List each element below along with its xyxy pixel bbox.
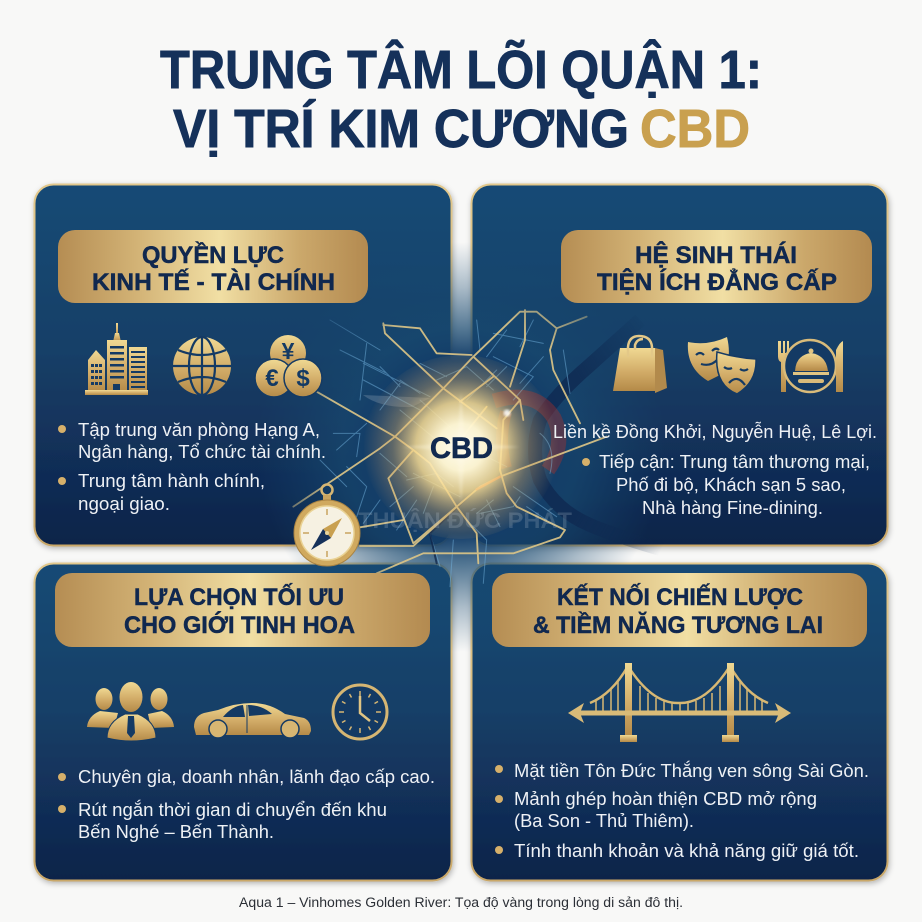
- heading pill: amenities: HỆ SINH THÁI: [635, 241, 797, 269]
- title: VỊ TRÍ KIM CƯƠNG: [173, 99, 629, 159]
- title: TRUNG TÂM LÕI QUẬN 1:: [160, 39, 762, 100]
- heading pill: amenities: TIỆN ÍCH ĐẲNG CẤP: [597, 268, 837, 296]
- panel: elite choice background: [34, 564, 452, 880]
- bullet list: connectivity: Mảnh ghép hoàn thiện CBD mở rộng: [514, 788, 817, 809]
- heading pill: elite choice: LỰA CHỌN TỐI ƯU: [134, 583, 344, 611]
- icon: office buildings: [85, 323, 148, 395]
- heading pill: connectivity: KẾT NỐI CHIẾN LƯỢC: [557, 583, 803, 611]
- title: CBD: [640, 99, 750, 159]
- bullet list: amenities: Nhà hàng Fine-dining.: [642, 497, 823, 518]
- icon: currency coins: $: [296, 365, 310, 392]
- central CBD city map: [288, 247, 658, 648]
- heading pill: amenities: [561, 230, 872, 303]
- bullet list: connectivity: Tính thanh khoản và khả năng giữ giá tốt.: [514, 840, 859, 861]
- heading pill: economic power: QUYỀN LỰC: [142, 241, 284, 269]
- icon: car: [194, 703, 311, 738]
- icon: compass: [294, 484, 360, 566]
- icon: clock: [333, 685, 387, 739]
- heading pill: economic power: [58, 230, 368, 303]
- title: [160, 39, 762, 159]
- panel: connectivity background: [472, 564, 888, 880]
- panel: economic power background: [34, 184, 452, 546]
- caption: Aqua 1 – Vinhomes Golden River: Tọa độ vàng trong lòng di sản đô thị.: [239, 895, 683, 910]
- bullet list: connectivity: [495, 760, 869, 861]
- bullet list: connectivity: Mặt tiền Tôn Đức Thắng ven sông Sài Gòn.: [514, 760, 869, 781]
- bullet list: economic power: ngoại giao.: [78, 493, 170, 514]
- icon: currency coins: [255, 335, 322, 397]
- bullet list: economic power: Ngân hàng, Tổ chức tài chính.: [78, 441, 326, 462]
- heading pill: economic power: KINH TẾ - TÀI CHÍNH: [92, 268, 335, 296]
- bullet list: economic power: Trung tâm hành chính,: [78, 470, 265, 491]
- icon: business people: [87, 682, 174, 741]
- heading pill: elite choice: CHO GIỚI TINH HOA: [124, 611, 355, 639]
- bullet list: connectivity: (Ba Son - Thủ Thiêm).: [514, 810, 694, 831]
- icon: theatre masks: [688, 337, 756, 394]
- icon: currency coins: €: [265, 365, 279, 392]
- icon: dining plate and cutlery: [778, 340, 843, 392]
- heading pill: connectivity: & TIỀM NĂNG TƯƠNG LAI: [533, 611, 823, 639]
- thin blue streets: [320, 320, 570, 587]
- panel: amenities background: [472, 184, 888, 546]
- bullet list: amenities: [553, 421, 877, 518]
- bullet list: elite choice: Rút ngắn thời gian di chuyển đến khu: [78, 799, 387, 820]
- glow: [363, 355, 559, 539]
- bullet list: amenities: Liền kề Đồng Khởi, Nguyễn Huệ, Lê Lợi.: [553, 421, 877, 442]
- bullet list: elite choice: Chuyên gia, doanh nhân, lãnh đạo cấp cao.: [78, 766, 435, 787]
- watermark: THUẬN ĐỨC PHÁT: [358, 508, 573, 533]
- CBD label: CBD: [430, 432, 493, 465]
- gold main roads: [293, 310, 607, 573]
- bullet list: economic power: Tập trung văn phòng Hạng A,: [78, 419, 320, 440]
- icon: shopping bag: [613, 336, 667, 393]
- heading pill: elite choice: [55, 573, 430, 647]
- bullet list: elite choice: [58, 766, 435, 842]
- icon: globe: [173, 337, 231, 395]
- dark canal: [429, 502, 464, 564]
- heading pill: connectivity: [492, 573, 867, 647]
- icon: currency coins: ¥: [282, 338, 295, 364]
- icon: bridge with arrows: [568, 663, 791, 742]
- bullet list: economic power: [58, 419, 326, 514]
- bullet list: amenities: Phố đi bộ, Khách sạn 5 sao,: [616, 474, 846, 495]
- bullet list: amenities: Tiếp cận: Trung tâm thương mại,: [599, 451, 870, 472]
- bullet list: elite choice: Bến Nghé – Bến Thành.: [78, 821, 274, 842]
